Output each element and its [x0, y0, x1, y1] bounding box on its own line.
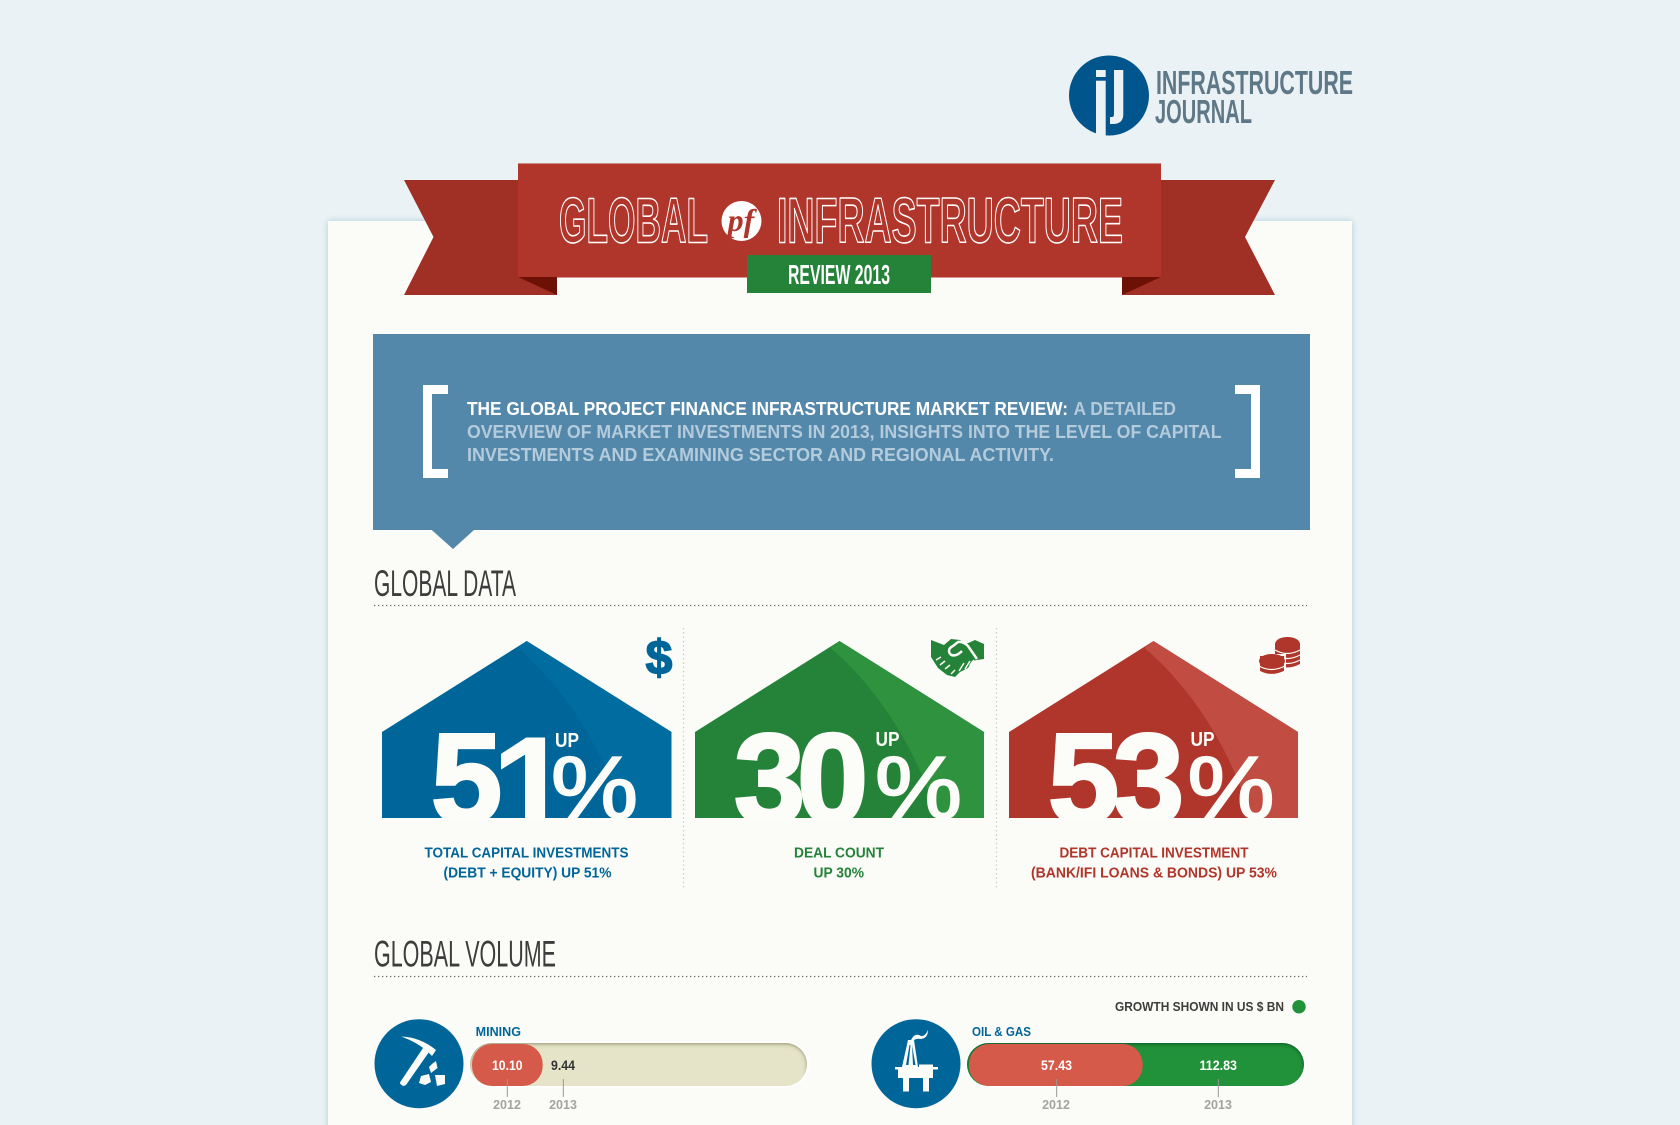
- stat: 51 percent: [382, 632, 673, 882]
- heading: global data: GLOBAL DATA: [374, 563, 516, 604]
- intro text: THE GLOBAL PROJECT FINANCE INFRASTRUCTURE MARKET REVIEW:: [467, 399, 1068, 419]
- stat: 51 percent: UP: [555, 730, 579, 752]
- caption: [424, 846, 629, 882]
- green review tag: [747, 255, 931, 293]
- icon: pickaxe: [374, 1019, 464, 1108]
- bar: 9.44: [551, 1058, 575, 1073]
- pf badge: pf: [725, 202, 758, 238]
- row: oil and gas: [872, 1019, 1309, 1112]
- caption: DEAL COUNT: [794, 846, 884, 862]
- year markers: [493, 1079, 577, 1112]
- right bracket: [1235, 385, 1260, 478]
- stat: 51 percent: %: [551, 738, 638, 837]
- bar: [470, 1043, 807, 1086]
- stat: 53 percent: UP: [1190, 729, 1214, 751]
- white card: [328, 221, 1352, 1125]
- caption: UP 30%: [814, 866, 864, 882]
- icon: dollar: $: [646, 632, 673, 685]
- title ribbon: INFRASTRUCTURE: [777, 184, 1123, 256]
- logo: Infrastructure Journal: INFRASTRUCTURE: [1156, 64, 1353, 101]
- caption: (DEBT + EQUITY) UP 51%: [444, 866, 612, 882]
- year markers: [1042, 1079, 1232, 1112]
- year markers: 2013: [549, 1098, 577, 1112]
- caption: [1031, 846, 1277, 882]
- year markers: 2012: [1042, 1098, 1070, 1112]
- legend: growth: GROWTH SHOWN IN US $ BN: [1115, 1000, 1284, 1014]
- stat: 53 percent: %: [1188, 738, 1274, 837]
- stat: 53 percent: 53: [1048, 708, 1184, 851]
- row: mining: [374, 1019, 812, 1112]
- pf badge: [722, 201, 762, 241]
- stat: 30 percent: %: [875, 738, 962, 837]
- caption: TOTAL CAPITAL INVESTMENTS: [424, 846, 629, 862]
- icon: oil rig: [872, 1019, 960, 1108]
- year markers: 2013: [1204, 1098, 1232, 1112]
- heading: global volume: GLOBAL VOLUME: [374, 934, 556, 974]
- intro text: INVESTMENTS AND EXAMINING SECTOR AND REGIONAL ACTIVITY.: [467, 445, 1054, 465]
- green review tag: REVIEW 2013: [788, 259, 890, 290]
- ribbon folds: [518, 277, 557, 295]
- title ribbon: [404, 163, 1275, 295]
- intro text: [467, 399, 1222, 465]
- bar: [967, 1043, 1304, 1086]
- bar: 57.43: [1041, 1058, 1072, 1073]
- intro text: OVERVIEW OF MARKET INVESTMENTS IN 2013, INSIGHTS INTO THE LEVEL OF CAPITAL: [467, 422, 1222, 442]
- logo: Infrastructure Journal: JOURNAL: [1155, 93, 1252, 130]
- ribbon tails: [404, 180, 557, 295]
- ribbon title text: GLOBAL: [559, 184, 708, 256]
- icon: handshake: [931, 639, 984, 677]
- stat: 30 percent: 30: [734, 708, 868, 851]
- stat: 30 percent: UP: [876, 729, 900, 751]
- stat: 53 percent: [1009, 637, 1300, 882]
- caption: (BANK/IFI LOANS & BONDS) UP 53%: [1031, 866, 1277, 882]
- bar: 112.83: [1200, 1058, 1237, 1073]
- label: MINING: [476, 1025, 521, 1039]
- stat: 51 percent: 5: [431, 708, 502, 851]
- year markers: 2012: [493, 1098, 521, 1112]
- stat: 51 percent: 1: [491, 706, 572, 869]
- logo: Infrastructure Journal: [1069, 56, 1353, 136]
- left bracket: [423, 385, 448, 478]
- bar: 10.10: [492, 1058, 523, 1073]
- panel: introduction: [373, 334, 1310, 549]
- caption: DEBT CAPITAL INVESTMENT: [1060, 846, 1249, 862]
- intro text: A DETAILED: [1074, 399, 1176, 419]
- caption: [794, 846, 884, 882]
- stat: 30 percent: [695, 639, 984, 882]
- icon: coins: [1259, 637, 1300, 676]
- label: OIL & GAS: [972, 1025, 1031, 1039]
